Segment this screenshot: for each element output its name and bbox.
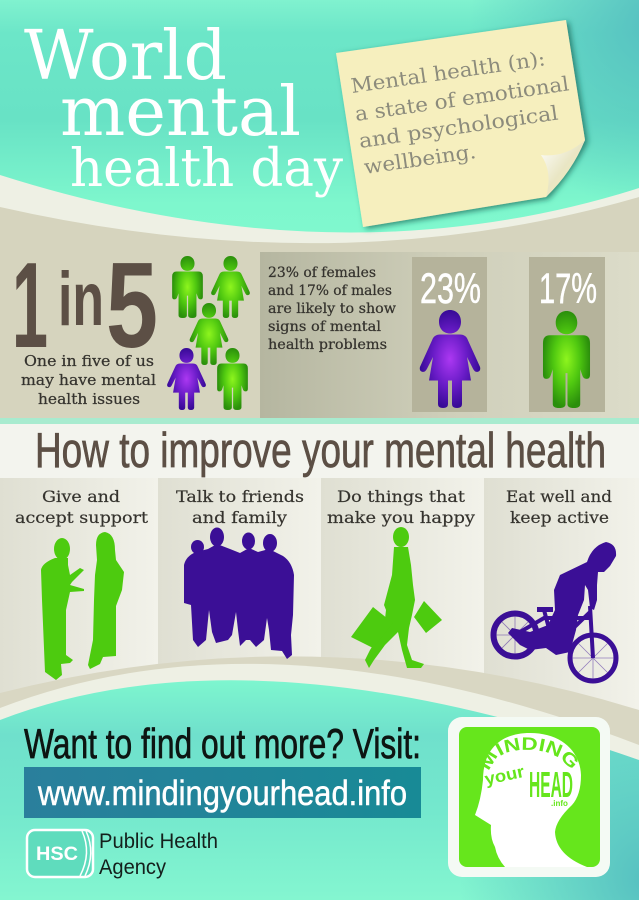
icon: cyclist [494, 542, 616, 681]
definition text: and psychological [357, 101, 560, 153]
gender statistic text: are likely to show [268, 301, 396, 317]
heading: keep active [510, 508, 609, 527]
icon: two people talking [41, 532, 124, 680]
icon: woman with shopping bags [351, 527, 442, 668]
gender statistic text: signs of mental [268, 319, 382, 335]
icon: group of five people [167, 256, 250, 410]
heading: make you happy [327, 508, 475, 527]
one in five caption: health issues [38, 390, 140, 408]
panel: male 17 percent: 17% [539, 265, 597, 313]
Public Health Agency: Agency [99, 856, 166, 879]
definition text [349, 46, 571, 179]
column 1: give and accept support [15, 487, 149, 680]
Minding Your Head logo [448, 717, 610, 877]
title: health day [70, 139, 344, 199]
middle beige section [0, 180, 639, 425]
one in five caption [21, 352, 156, 408]
Public Health Agency: Public Health [99, 830, 218, 853]
column 3: do things that make you happy [327, 487, 475, 668]
heading [15, 487, 149, 527]
heading: Talk to friends [176, 487, 304, 506]
heading: and family [192, 508, 287, 527]
one in five caption: One in five of us [24, 352, 154, 370]
icon: head silhouette [475, 733, 587, 867]
panel: female 23 percent [412, 257, 487, 412]
definition text: wellbeing. [362, 139, 478, 179]
1 in 5 statistic: 1 [12, 237, 48, 373]
HSC logo [27, 830, 93, 877]
website banner: www.mindingyourhead.info [37, 774, 407, 813]
panel: gender statistics background [260, 252, 639, 418]
column 4: eat well and keep active [494, 487, 616, 681]
Public Health Agency [99, 830, 218, 879]
gender statistic text: 23% of females [268, 265, 376, 281]
sticky note [336, 20, 585, 227]
HSC logo: HSC [36, 844, 78, 865]
mint divider [0, 418, 639, 424]
heading: accept support [15, 508, 149, 527]
header background [0, 0, 639, 232]
panel: female 23 percent: 23% [420, 265, 481, 313]
heading [506, 487, 612, 527]
logo wordmark: .info [551, 799, 568, 808]
title: World [24, 17, 227, 96]
heading: Give and [42, 487, 120, 506]
title: mental [60, 73, 301, 152]
definition text: a state of emotional [353, 71, 571, 126]
logo wordmark: HEAD [529, 764, 573, 805]
curved light band [0, 170, 639, 243]
page curl [541, 140, 585, 197]
gender statistic text: health problems [268, 337, 387, 353]
bottom background arcs [0, 656, 639, 900]
1 in 5 statistic: in [58, 257, 104, 342]
one in five caption: may have mental [21, 371, 156, 389]
heading [327, 487, 475, 527]
column 2: talk to friends and family [176, 487, 304, 659]
column backgrounds [0, 478, 639, 738]
gender statistic text: and 17% of males [268, 283, 392, 299]
definition text: Mental health (n): [349, 46, 547, 98]
1 in 5 statistic: 5 [106, 237, 158, 373]
logo wordmark: MINDING [484, 737, 578, 770]
logo wordmark [483, 737, 578, 808]
website banner [24, 767, 421, 818]
heading: Eat well and [506, 487, 612, 506]
heading [176, 487, 304, 527]
icon: group of friends [184, 528, 294, 659]
gender statistic text [268, 265, 396, 353]
heading: Do things that [337, 487, 466, 506]
logo wordmark: your [483, 762, 526, 789]
call to action heading: Want to find out more? Visit: [24, 720, 421, 767]
title [24, 17, 344, 199]
panel: male 17 percent [529, 257, 605, 412]
1 in 5 statistic [12, 237, 158, 373]
